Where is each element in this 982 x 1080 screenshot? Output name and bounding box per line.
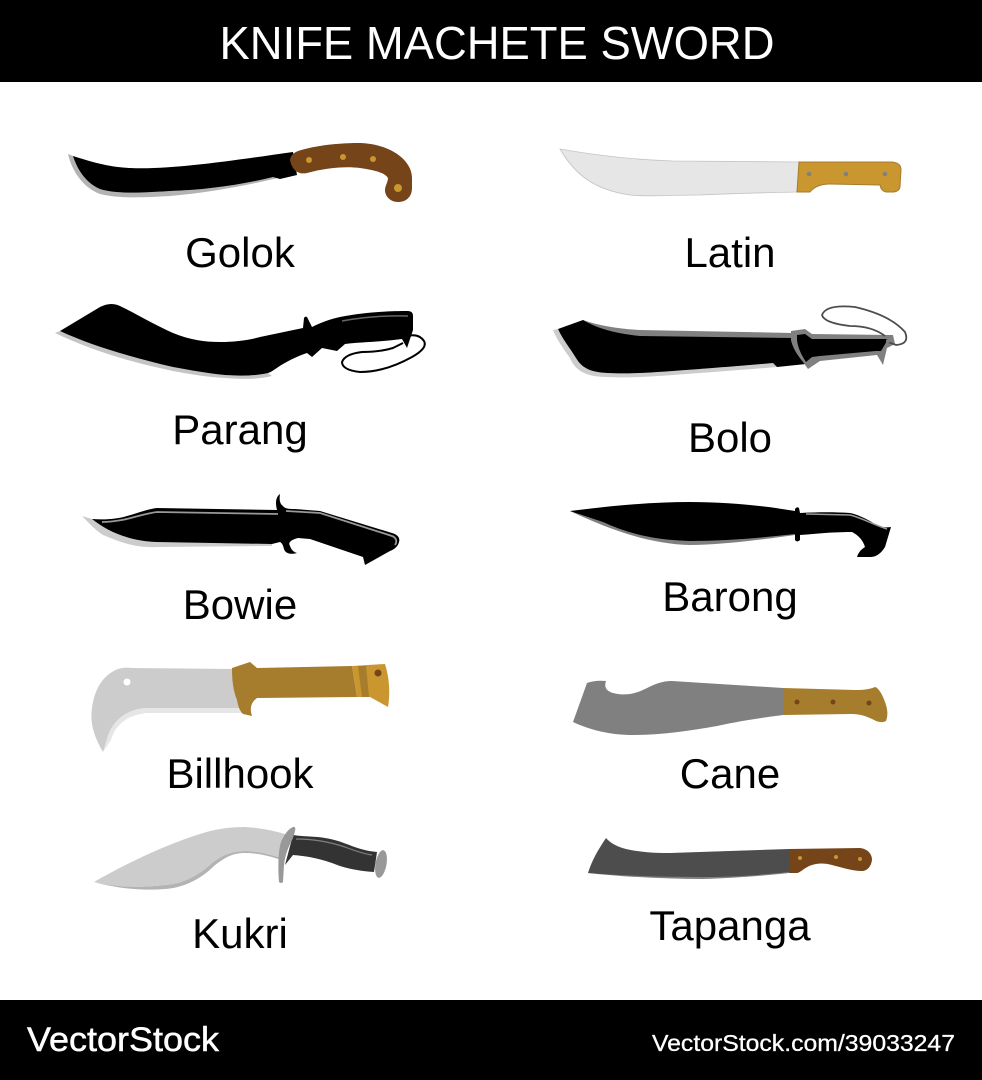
footer image id: VectorStock.com/39033247 bbox=[652, 1030, 955, 1056]
label: Latin: Latin bbox=[684, 229, 776, 276]
item: Parang bbox=[55, 304, 425, 453]
icon: Parang machete bbox=[55, 304, 425, 379]
item: Cane bbox=[573, 681, 887, 797]
label: Billhook: Billhook bbox=[166, 750, 315, 797]
icon: Billhook bbox=[91, 662, 389, 752]
icon: Tapanga machete bbox=[588, 838, 872, 879]
item: Bowie bbox=[82, 494, 399, 628]
item: Kukri bbox=[94, 827, 389, 957]
item: Latin bbox=[560, 149, 901, 276]
icon: Bowie knife bbox=[82, 494, 399, 565]
icon: Golok machete bbox=[68, 143, 412, 202]
label: Bowie: Bowie bbox=[183, 581, 297, 628]
label: Barong: Barong bbox=[662, 573, 798, 620]
footer logo text: VectorStock bbox=[27, 1021, 220, 1059]
label: Golok: Golok bbox=[185, 229, 296, 276]
label: Kukri: Kukri bbox=[192, 910, 288, 957]
label: Parang: Parang bbox=[172, 406, 308, 453]
item: Tapanga bbox=[588, 838, 872, 949]
icon: Cane machete bbox=[573, 681, 887, 735]
icon: Kukri knife bbox=[94, 827, 389, 890]
label: Bolo: Bolo bbox=[688, 414, 772, 461]
item: Bolo bbox=[553, 306, 906, 461]
icon: Bolo machete bbox=[553, 306, 906, 377]
label: Tapanga: Tapanga bbox=[649, 902, 811, 949]
footer banner bbox=[0, 1000, 982, 1080]
item: Billhook bbox=[91, 662, 389, 797]
item: Golok bbox=[68, 143, 412, 276]
icon: Barong knife bbox=[570, 502, 891, 557]
icon: Latin machete bbox=[560, 149, 901, 196]
label: Cane: Cane bbox=[680, 750, 780, 797]
title banner bbox=[0, 0, 982, 82]
item: Barong bbox=[570, 502, 891, 620]
title banner: KNIFE MACHETE SWORD bbox=[220, 17, 774, 69]
